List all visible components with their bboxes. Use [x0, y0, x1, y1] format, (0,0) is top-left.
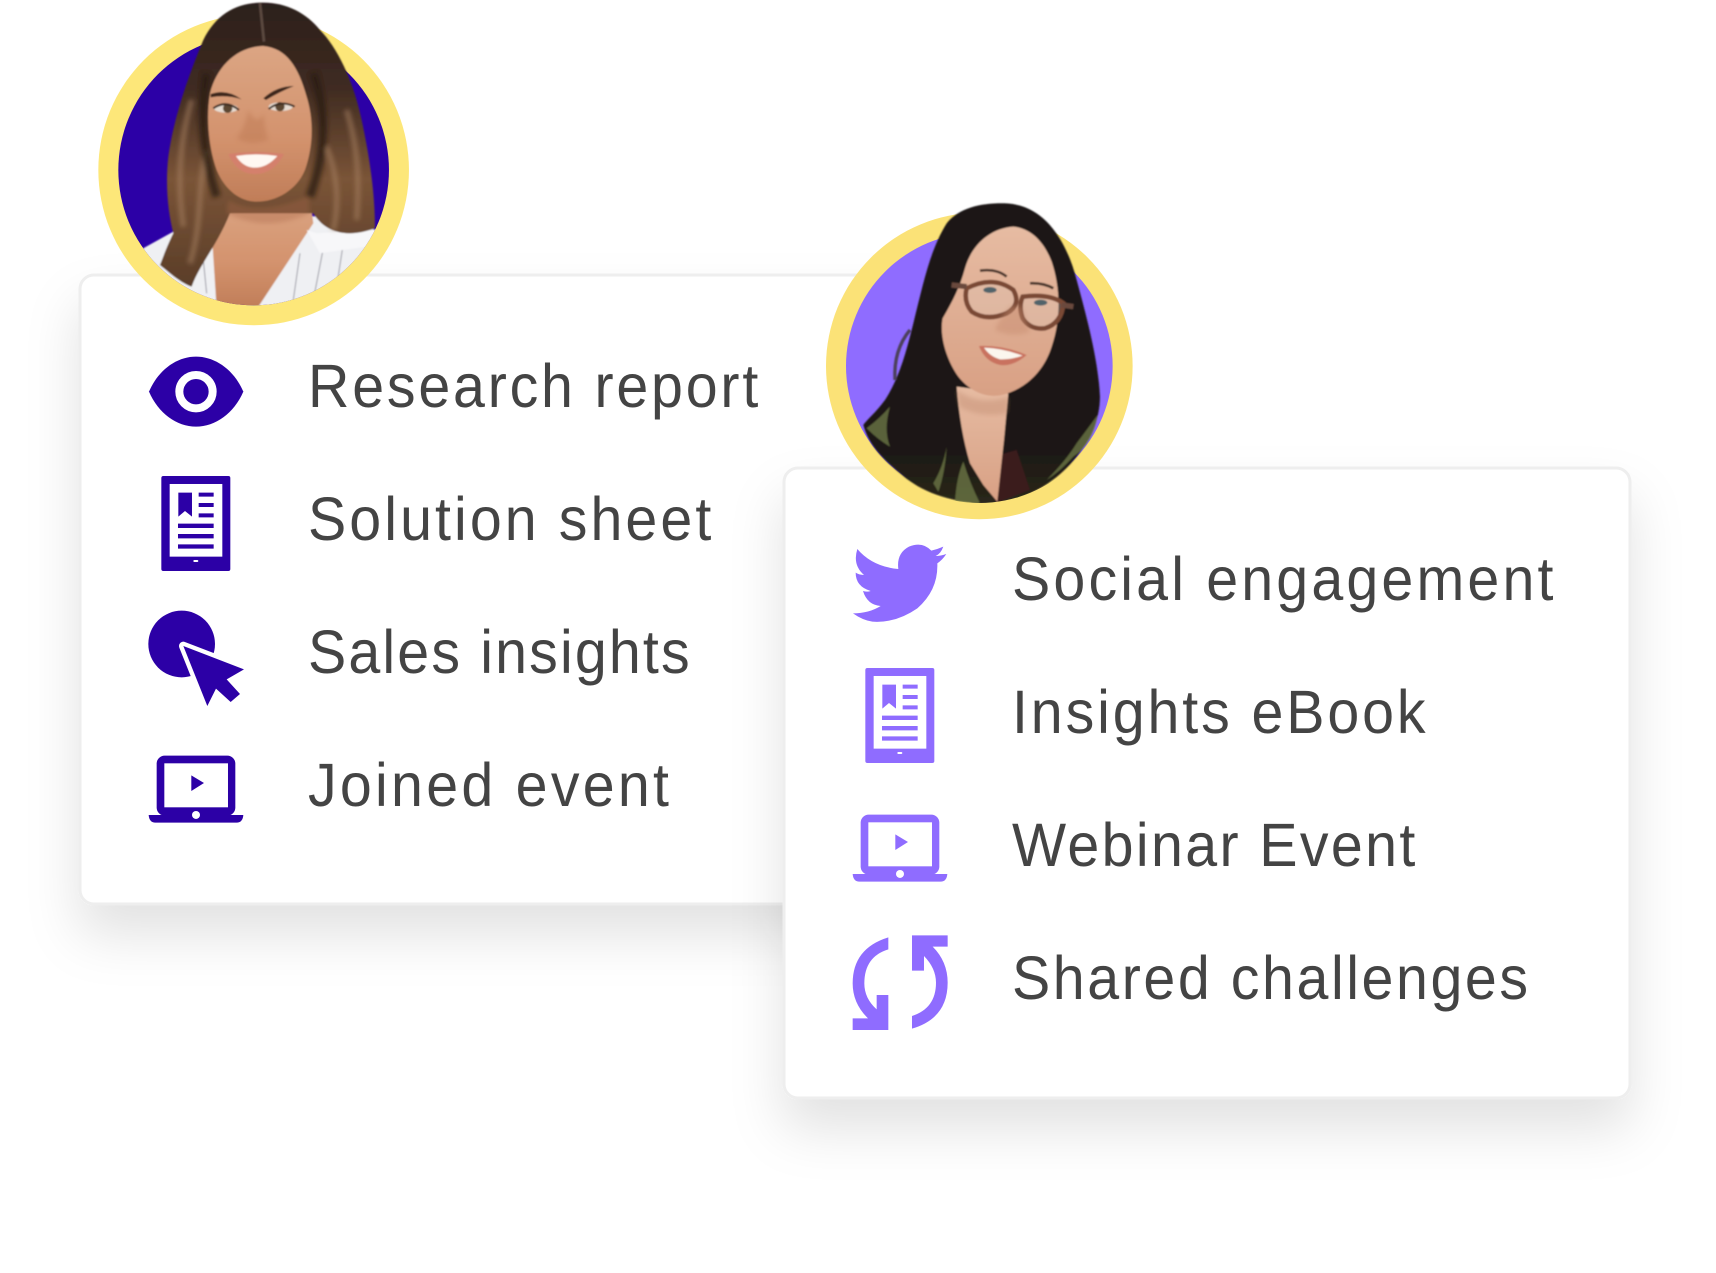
avatar: woman with brown hair — [98, 3, 409, 333]
nose — [240, 114, 266, 142]
mouth — [979, 346, 1027, 365]
icon: tablet document — [865, 668, 934, 763]
nose — [995, 307, 1030, 335]
icon: twitter bird — [853, 545, 946, 622]
glasses — [966, 282, 1063, 329]
eyes — [214, 104, 238, 113]
icon: sync arrows — [853, 935, 948, 1030]
panel: left card — [80, 275, 920, 904]
label: sales insights: Sales insights — [308, 617, 690, 686]
icon: cursor click — [148, 611, 244, 706]
label: insights ebook: Insights eBook — [1012, 677, 1426, 746]
hair strand line — [895, 330, 910, 380]
icon: eye — [149, 357, 243, 427]
icon: laptop play — [853, 815, 947, 882]
icon: tablet document — [161, 476, 230, 571]
brows — [211, 92, 242, 99]
neck — [957, 387, 1008, 502]
label: solution sheet: Solution sheet — [308, 484, 712, 553]
green hair tips — [867, 407, 1098, 503]
label: social engagement: Social engagement — [1012, 544, 1554, 613]
shirt — [143, 215, 376, 306]
label: webinar event: Webinar Event — [1012, 810, 1416, 879]
mouth — [228, 152, 284, 174]
label: research report: Research report — [308, 351, 759, 420]
hair — [160, 3, 375, 287]
shirt — [998, 450, 1030, 502]
avatar: woman with glasses — [826, 203, 1133, 519]
face — [942, 227, 1059, 396]
label: joined event: Joined event — [308, 750, 669, 819]
neck shadow — [227, 197, 310, 223]
label: shared challenges: Shared challenges — [1012, 943, 1528, 1012]
hair — [863, 203, 1100, 504]
icon: laptop play — [149, 756, 243, 823]
panel: right card — [784, 468, 1630, 1098]
face — [208, 46, 312, 202]
